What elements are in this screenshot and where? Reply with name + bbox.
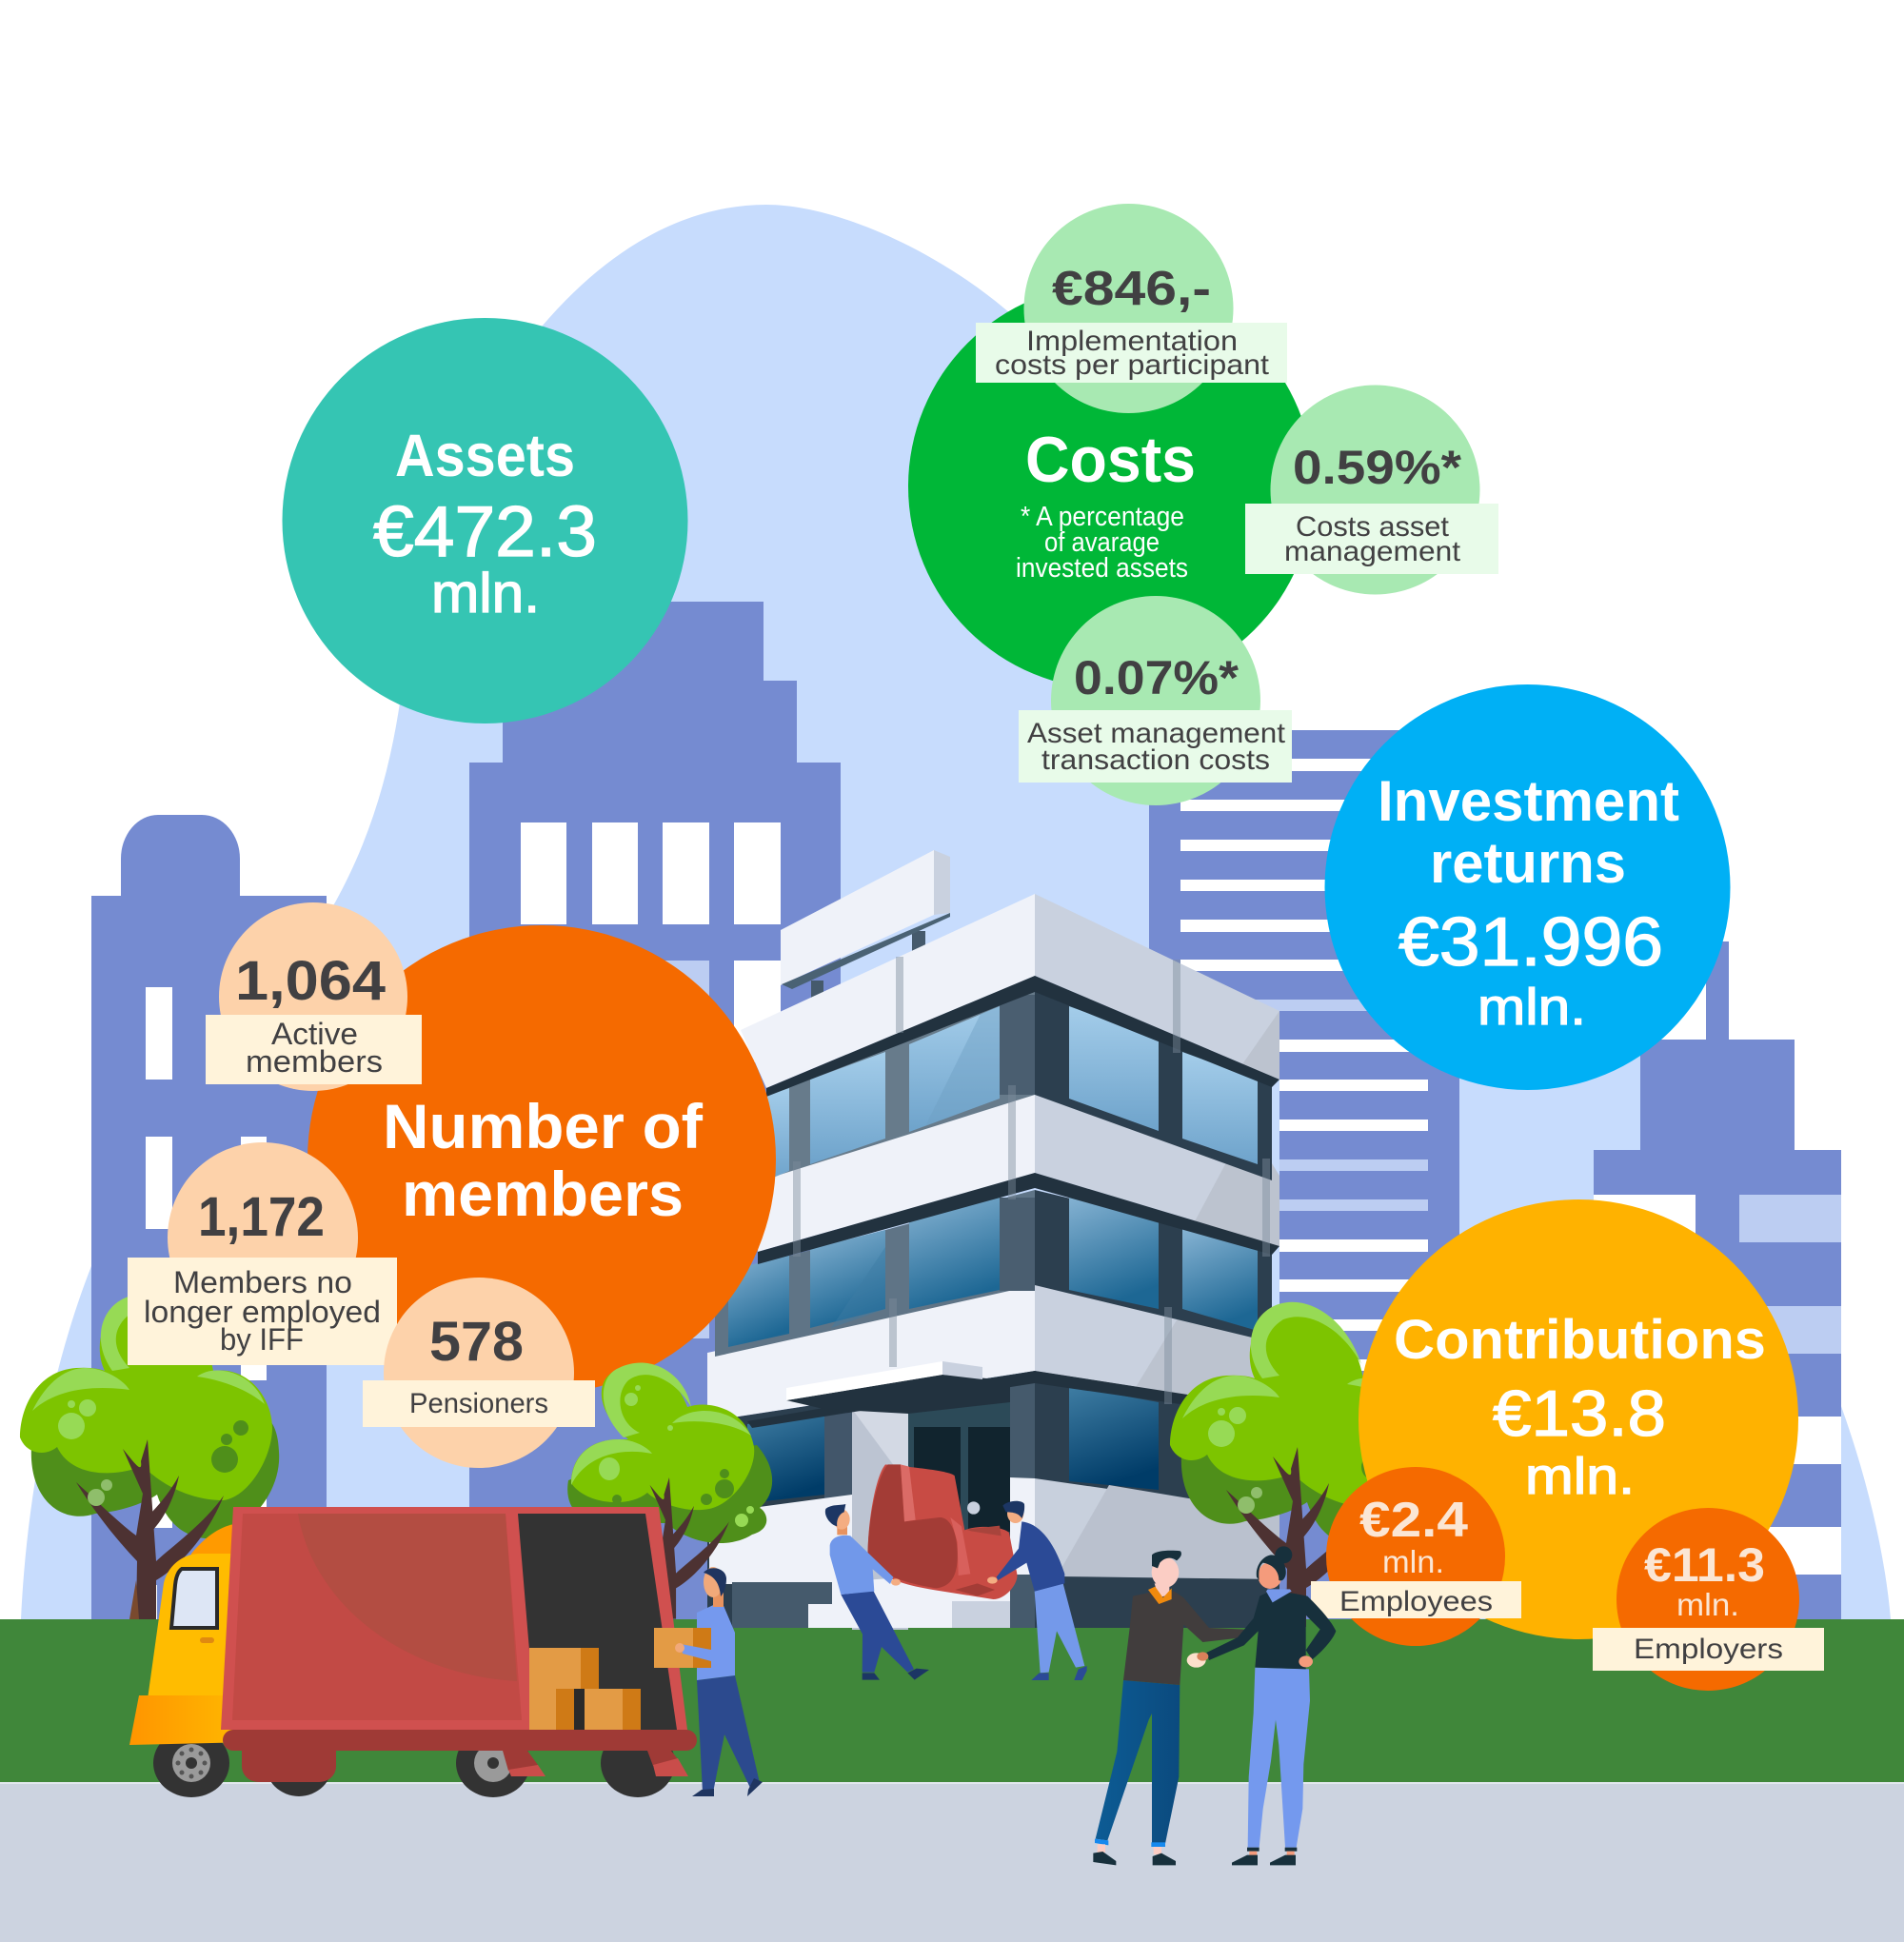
woman <box>1197 1546 1336 1865</box>
chassis <box>223 1730 697 1782</box>
costs asset management <box>1245 385 1498 594</box>
employees: mln. <box>1382 1544 1444 1579</box>
panel: contributions <box>1311 1199 1824 1691</box>
floor with windows, upper <box>762 990 1272 1180</box>
top band <box>741 894 1279 1097</box>
armchair <box>868 1464 1017 1599</box>
right skyline building <box>1594 941 1841 1619</box>
active members: 1,064 <box>235 950 386 1012</box>
members no longer employed: longer employed <box>144 1295 381 1329</box>
heading and total <box>1394 1309 1766 1505</box>
cab <box>129 1524 254 1745</box>
centre-left skyline building <box>469 602 841 1619</box>
wheels <box>153 1728 675 1797</box>
heading and footnote: Costs <box>1025 424 1196 496</box>
members no longer employed: by IFF <box>220 1322 304 1357</box>
implementation costs: Implementation <box>1026 326 1238 357</box>
heading and footnote <box>1016 424 1196 584</box>
panel: number of members <box>128 902 776 1468</box>
panel: assets: €472.3 <box>373 491 597 571</box>
heading and total: mln. <box>1525 1448 1635 1505</box>
pensioners <box>363 1278 595 1468</box>
transaction costs: 0.07%* <box>1074 651 1240 704</box>
costs circle <box>908 284 1314 689</box>
road <box>0 1782 1904 1942</box>
employers: €11.3 <box>1644 1538 1765 1592</box>
employees: Employees <box>1339 1586 1493 1617</box>
heading: number of members: members <box>402 1159 684 1229</box>
active members: Active <box>271 1017 358 1051</box>
panel: investment returns: mln. <box>1478 979 1586 1036</box>
person carrying box <box>654 1567 763 1796</box>
heading and footnote: * A percentage <box>1021 502 1184 532</box>
left skyline building <box>91 815 327 1619</box>
yellow circle <box>1359 1199 1798 1639</box>
pensioners: 578 <box>429 1311 524 1373</box>
heading: number of members: Number of <box>383 1091 704 1161</box>
pensioners: Pensioners <box>409 1388 548 1419</box>
panel: investment returns: returns <box>1430 831 1626 895</box>
background sky shape <box>21 205 1891 1619</box>
panel: costs <box>908 204 1498 805</box>
big orange circle <box>307 925 776 1394</box>
roof sign <box>781 850 950 1007</box>
panel: assets: Assets <box>395 423 575 489</box>
third band and canopy <box>707 1283 1279 1428</box>
employers <box>1593 1508 1824 1691</box>
floor with windows, lower <box>715 1190 1272 1357</box>
transaction costs <box>1019 596 1292 805</box>
man <box>1093 1551 1244 1865</box>
implementation costs: €846,- <box>1052 261 1211 315</box>
heading and total: Contributions <box>1394 1309 1766 1371</box>
centre-right skyline building with stripes <box>1149 730 1459 1619</box>
transaction costs: Asset management <box>1027 718 1286 749</box>
employers: mln. <box>1676 1587 1739 1622</box>
ground floor <box>707 1371 1279 1630</box>
panel: investment returns: Investment <box>1378 769 1679 833</box>
panel: assets <box>282 318 687 723</box>
second band <box>758 1089 1279 1264</box>
heading: number of members <box>383 1091 704 1229</box>
cargo box <box>221 1507 687 1730</box>
employees <box>1311 1467 1521 1646</box>
transaction costs: transaction costs <box>1041 744 1270 776</box>
man right <box>987 1501 1087 1680</box>
two people shaking hands <box>1093 1546 1336 1865</box>
panel: investment returns <box>1325 684 1731 1090</box>
implementation costs: costs per participant <box>995 349 1270 381</box>
mud flaps <box>508 1758 688 1776</box>
costs asset management: management <box>1284 536 1461 567</box>
people carrying armchair <box>825 1464 1087 1680</box>
central office building <box>707 850 1279 1630</box>
heading and footnote: of avarage <box>1044 527 1160 558</box>
members no longer employed <box>128 1142 397 1365</box>
implementation costs <box>976 204 1287 413</box>
heading and total: €13.8 <box>1493 1377 1666 1450</box>
costs asset management: Costs asset <box>1296 511 1450 543</box>
glass railing posts <box>793 957 1270 1404</box>
employees: €2.4 <box>1359 1493 1468 1548</box>
tree: right <box>1170 1302 1429 1627</box>
man left <box>825 1504 929 1680</box>
heading and footnote: invested assets <box>1016 553 1188 584</box>
active members: members <box>246 1044 383 1079</box>
panel: investment returns: €31.996 <box>1398 904 1663 981</box>
members no longer employed: 1,172 <box>198 1186 325 1248</box>
costs asset management: 0.59%* <box>1293 441 1462 494</box>
tree: behind van <box>567 1363 772 1619</box>
employers: Employers <box>1634 1634 1783 1665</box>
members no longer employed: Members no <box>173 1265 352 1299</box>
panel: assets: mln. <box>431 563 540 624</box>
active members <box>206 902 422 1091</box>
lawn <box>0 1619 1904 1782</box>
moving van <box>129 1507 697 1797</box>
boxes in van <box>529 1648 641 1730</box>
tree: left <box>20 1295 279 1619</box>
